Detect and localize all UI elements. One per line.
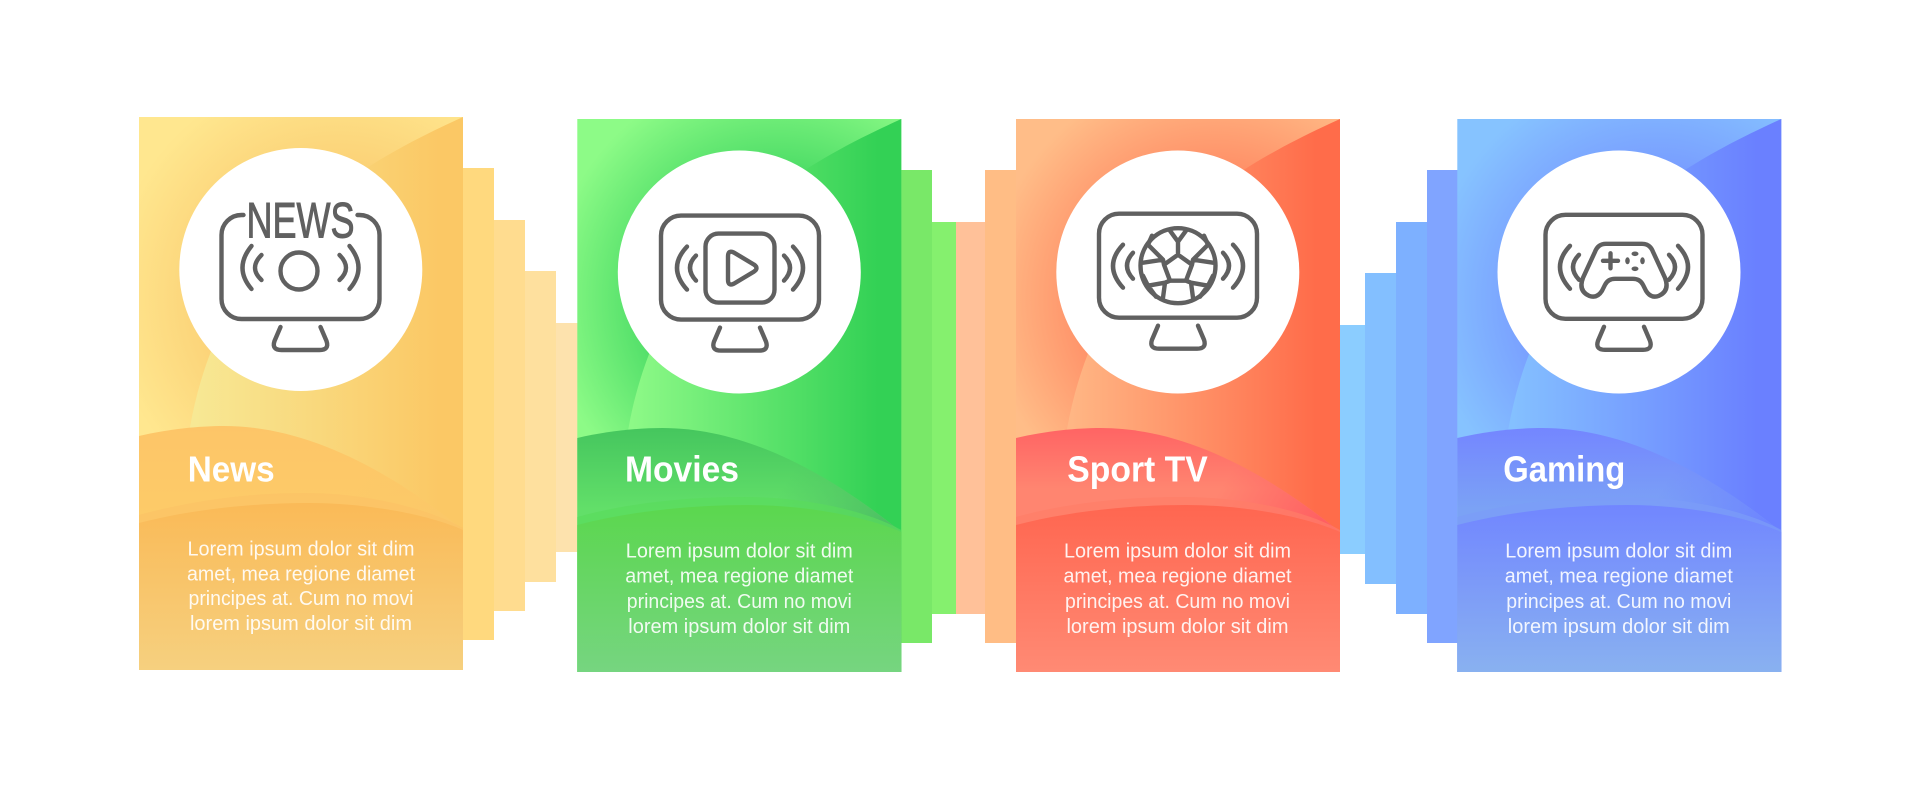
connector strips: movies to sport tv [901,170,1016,643]
text block: movies: amet, mea regione diamet [625,566,854,588]
text block: news: amet, mea regione diamet [187,563,415,585]
connector strips: sport tv to gaming [1340,170,1458,643]
text block: sport tv [1064,540,1292,638]
panel: sport tv [1016,119,1340,672]
icon circle: gaming [1498,150,1740,394]
icon: gamepad monitor [1546,215,1702,350]
text block: sport tv: principes at. Cum no movi [1065,591,1290,613]
text block: gaming: Lorem ipsum dolor sit dim [1505,540,1732,562]
heading: movies: Movies [625,448,739,490]
icon circle: sport tv [1056,150,1299,394]
text block: gaming: lorem ipsum dolor sit dim [1508,616,1730,638]
heading: gaming: Gaming [1503,448,1625,490]
icon: soccer monitor [1099,214,1257,349]
text block: movies: lorem ipsum dolor sit dim [628,616,850,638]
text block: movies: Lorem ipsum dolor sit dim [626,540,853,562]
text block: gaming: amet, mea regione diamet [1505,566,1733,588]
heading: news: News [188,449,275,490]
icon circle: movies [618,150,861,394]
panel: gaming [1457,119,1781,672]
text block: news: principes at. Cum no movi [188,588,414,610]
icon circle: news [179,148,422,391]
icon: news monitor: NEWS [246,193,355,249]
icon: movies monitor [661,216,819,351]
text block: gaming: principes at. Cum no movi [1506,591,1731,613]
heading: sport tv: Sport TV [1067,448,1208,490]
text block: sport tv: amet, mea regione diamet [1064,566,1292,588]
text block: sport tv: lorem ipsum dolor sit dim [1066,616,1288,638]
text block: news: lorem ipsum dolor sit dim [190,613,412,635]
panel: movies [577,119,901,672]
icon: news monitor [222,193,380,350]
text block: gaming [1505,540,1733,638]
text block: movies [625,540,854,638]
panel: news [139,117,463,670]
text block: news [187,538,415,635]
text block: news: Lorem ipsum dolor sit dim [188,538,414,560]
connector strips: news to movies [463,168,578,640]
text block: sport tv: Lorem ipsum dolor sit dim [1064,540,1291,562]
text block: movies: principes at. Cum no movi [627,591,852,613]
